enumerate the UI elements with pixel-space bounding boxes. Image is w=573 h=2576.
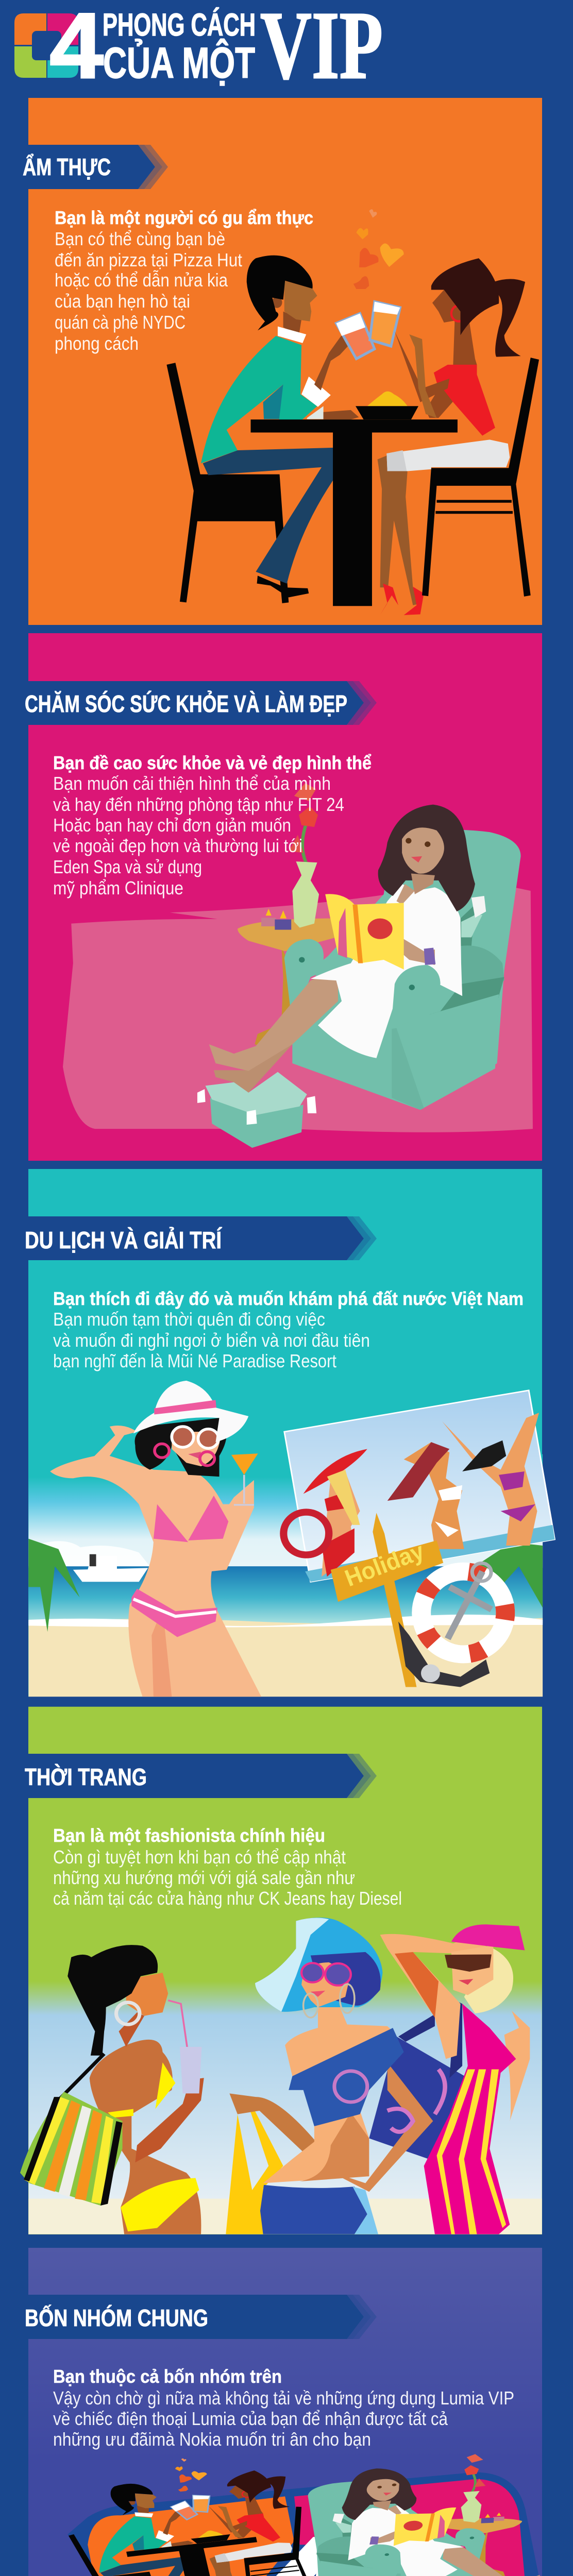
section banner — [25, 2295, 377, 2339]
text block: và muốn đi nghỉ ngơi ở biển và nơi đầu tiên — [53, 1330, 370, 1351]
table — [250, 419, 458, 606]
woman legs — [378, 455, 422, 605]
text block: Bạn thích đi đây đó và muốn khám phá đất nước Việt Nam — [53, 1288, 524, 1309]
collage backing — [68, 2472, 553, 2576]
text block — [53, 2366, 514, 2450]
text block: mỹ phẩm Clinique — [53, 877, 183, 899]
left chair — [166, 363, 289, 603]
left woman — [20, 1945, 204, 2234]
panel: chăm sóc sức khỏe và làm đẹp — [25, 633, 542, 1161]
text block: Bạn thuộc cả bốn nhóm trên — [53, 2366, 282, 2387]
section banner: THỜI TRANG — [25, 1764, 147, 1790]
section banner — [25, 681, 377, 725]
illustration: couple at table — [166, 209, 539, 615]
right chair — [422, 358, 539, 597]
section banner: DU LỊCH VÀ GIẢI TRÍ — [25, 1227, 222, 1253]
text block — [55, 207, 313, 354]
text block — [53, 1825, 402, 1909]
text block: Bạn là một người có gu ẩm thực — [55, 207, 313, 228]
hearts — [369, 209, 377, 217]
orange tile — [88, 2497, 294, 2576]
text block: Hoặc bạn hay chỉ đơn giản muốn — [53, 815, 291, 836]
women in photo — [304, 1449, 367, 1494]
pink tile — [294, 2479, 527, 2576]
right woman — [504, 2011, 530, 2121]
section banner — [25, 1754, 377, 1798]
title text: PHONG CÁCH — [103, 7, 256, 42]
illustration: woman reading in armchair — [63, 783, 533, 1148]
text block: Còn gì tuyệt hơn khi bạn có thể cập nhật — [53, 1846, 346, 1868]
text block: những xu hướng mới với giá sale gần như — [53, 1867, 355, 1888]
head — [135, 1418, 227, 1477]
photo — [283, 1391, 555, 1582]
woman — [386, 439, 510, 471]
text block: những ưu đãimà Nokia muốn tri ân cho bạn — [53, 2429, 371, 2450]
text block: Vậy còn chờ gì nữa mà không tải về những ứng dụng Lumia VIP — [53, 2387, 514, 2409]
text block: bạn nghĩ đến là Mũi Né Paradise Resort — [53, 1350, 336, 1371]
illustration: three women — [20, 1707, 542, 2234]
panel: bốn nhóm chung — [25, 2248, 553, 2576]
section banner — [23, 145, 168, 189]
illustration: beach scene — [28, 1381, 555, 1697]
text block: cả năm tại các cửa hàng như CK Jeans hay Diesel — [53, 1888, 402, 1909]
body — [50, 1456, 261, 1697]
front arm — [391, 965, 441, 1029]
palm — [28, 1539, 80, 1632]
text block: vẻ ngoài đẹp hơn và thường lui tới — [53, 835, 302, 856]
icon: four-colour tile logo — [14, 13, 78, 78]
text block: hoặc có thể dẫn nửa kia — [55, 269, 228, 291]
centre woman — [226, 2106, 283, 2234]
text block: Eden Spa và sử dụng — [53, 856, 202, 877]
collage figures — [54, 2446, 549, 2576]
hat — [133, 1381, 248, 1442]
text block: Bạn là một fashionista chính hiệu — [53, 1825, 325, 1846]
title text: CỦA MỘT — [103, 39, 255, 87]
panel: ẩm thực — [23, 98, 542, 625]
panel: thời trang — [20, 1707, 542, 2234]
book — [325, 894, 404, 970]
ship — [73, 1556, 148, 1582]
text block: Bạn muốn tạm thời quên đi công việc — [53, 1309, 325, 1330]
ottoman — [197, 1072, 316, 1148]
section banner: BỐN NHÓM CHUNG — [25, 2304, 208, 2331]
text block: Bạn muốn cải thiện hình thể của mình — [53, 773, 331, 794]
man — [203, 448, 350, 584]
text block — [53, 752, 372, 899]
armchair — [292, 830, 521, 1110]
legs — [214, 1044, 292, 1093]
title text — [103, 0, 383, 99]
text block: phong cách — [55, 333, 139, 354]
candles — [261, 918, 276, 926]
text block: Bạn có thể cùng bạn bè — [55, 228, 225, 249]
holiday sign — [331, 1513, 443, 1687]
head and hair — [378, 805, 475, 911]
striped bag — [20, 2092, 123, 2206]
text block: quán cà phê NYDC — [55, 312, 186, 333]
text block: về chiếc điện thoại Lumia của bạn để nhận được tất cả — [53, 2408, 448, 2429]
panel: du lịch và giải trí — [25, 1169, 555, 1697]
illustration: four tile collage — [68, 2472, 553, 2576]
mugs — [336, 313, 375, 359]
text block: và hay đến những phòng tập như FIT 24 — [53, 794, 344, 815]
bikini — [154, 1504, 188, 1542]
rug — [63, 884, 533, 1132]
holiday label: Holiday — [341, 1537, 428, 1591]
title header — [14, 0, 383, 99]
text block: Bạn đề cao sức khỏe và vẻ đẹp hình thể — [53, 752, 372, 773]
text block: đến ăn pizza tại Pizza Hut — [55, 249, 242, 270]
text block: của bạn hẹn hò tại — [55, 291, 190, 312]
text block — [53, 1288, 524, 1371]
vase and flower — [302, 822, 307, 865]
section banner: ẨM THỰC — [23, 154, 111, 180]
section banner: CHĂM SÓC SỨC KHỎE VÀ LÀM ĐẸP — [25, 690, 347, 717]
section banner — [25, 1216, 377, 1260]
robe — [311, 884, 462, 1058]
side table — [255, 946, 294, 1046]
cocktail — [231, 1453, 258, 1475]
anchor and lifebuoy — [398, 1563, 505, 1687]
